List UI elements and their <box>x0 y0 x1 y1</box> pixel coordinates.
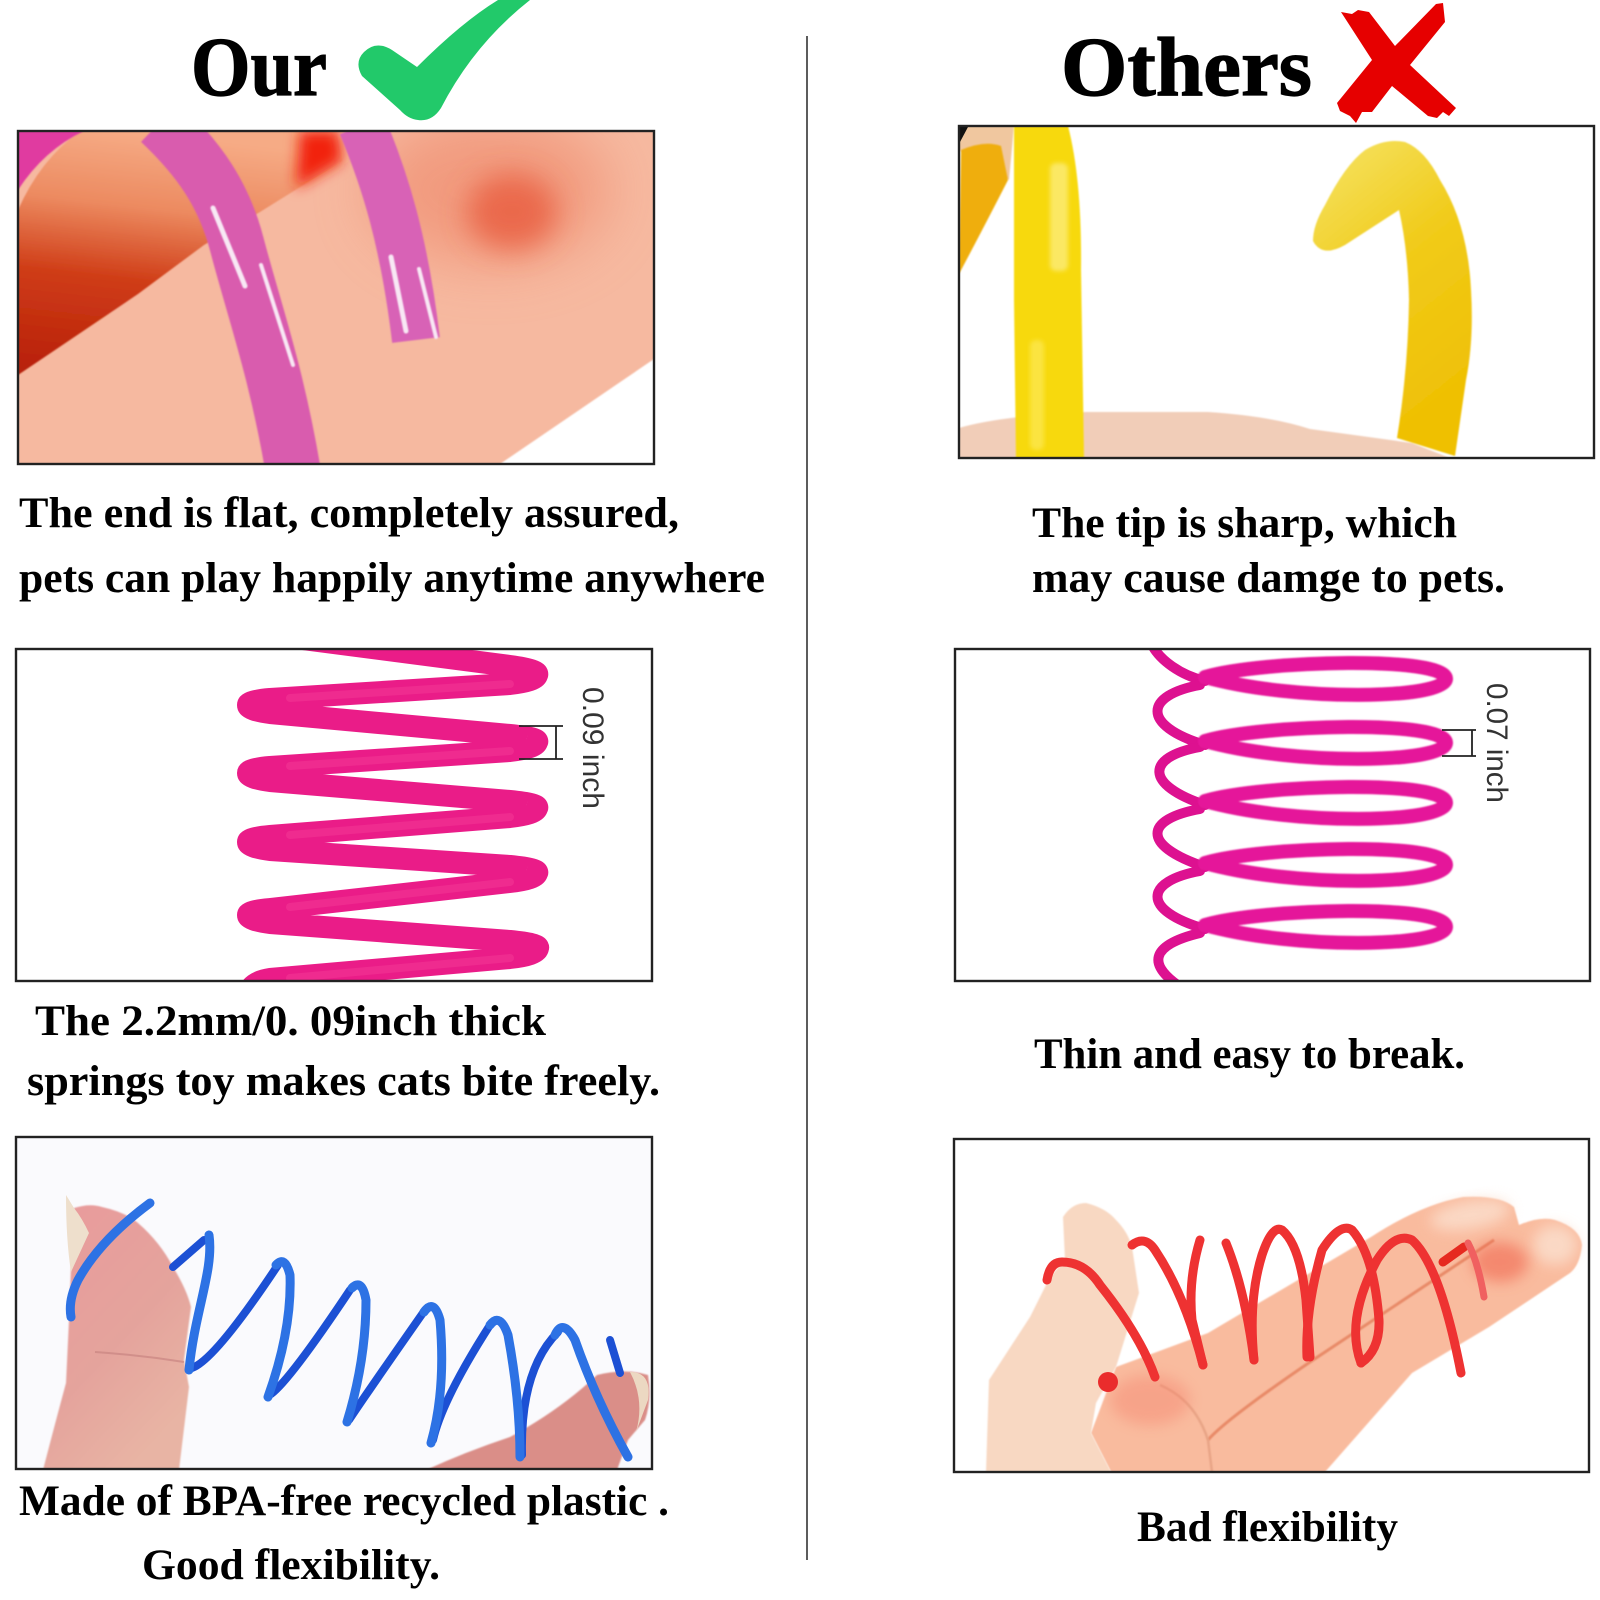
redness core <box>467 174 557 250</box>
caption: BPA-free: Made of BPA-free recycled plastic . <box>19 1478 669 1525</box>
spring tube flat end <box>362 125 416 340</box>
icon: green check mark <box>358 0 530 120</box>
yellow hook right <box>1313 141 1472 456</box>
yellow tube left <box>1014 126 1084 458</box>
skin at bottom <box>960 411 1448 457</box>
blue spring front strokes <box>70 1203 628 1457</box>
caption: flat end: pets can play happily anytime anywhere <box>19 555 765 602</box>
crease between fingers <box>1208 1240 1494 1440</box>
dimension label 0.09 inch: 0.09 inch <box>576 687 609 809</box>
bright red corner <box>296 131 342 188</box>
tube highlights <box>1050 163 1068 271</box>
panel: flat end photo <box>18 115 654 470</box>
center divider line <box>806 36 808 1560</box>
thumb nail <box>66 1195 89 1272</box>
skin background <box>18 131 654 464</box>
caption: flat end: The end is flat, completely assured, <box>19 490 679 537</box>
finger nail <box>630 1372 649 1432</box>
wide redness on skin <box>370 115 610 265</box>
caption: sharp tip: may cause damge to pets. <box>1032 555 1505 602</box>
panel: sharp tip photo <box>959 126 1594 462</box>
fingertip highlights <box>1428 1194 1512 1236</box>
dimension bracket 0.07 <box>1442 730 1476 756</box>
red spring end ball <box>1098 1372 1118 1392</box>
black corner mark <box>960 127 968 142</box>
panel: red spring photo <box>954 1139 1589 1472</box>
thick pink spring <box>248 638 538 995</box>
fingers base fill <box>1091 1197 1582 1472</box>
panel: thick spring 0.09 inch <box>16 638 652 995</box>
knuckle crease <box>95 1352 184 1362</box>
spring tube at top left corner <box>18 131 84 190</box>
caption: sharp tip <box>1032 500 1505 602</box>
caption: thick spring: springs toy makes cats bite freely. <box>27 1058 660 1105</box>
thin spring left coils <box>1152 645 1205 990</box>
caption: thick spring <box>27 998 660 1105</box>
caption: thin spring: Thin and easy to break. <box>1034 1031 1465 1078</box>
caption: bad flexibility: Bad flexibility <box>1137 1504 1399 1551</box>
red spring coils <box>1047 1262 1155 1377</box>
left skin and orange tube <box>959 126 1014 180</box>
caption: BPA-free <box>19 1478 669 1589</box>
spring tube long <box>160 122 293 470</box>
thumb <box>986 1203 1139 1472</box>
caption: sharp tip: The tip is sharp, which <box>1032 500 1457 547</box>
thumb <box>43 1205 191 1470</box>
caption: BPA-free: Good flexibility. <box>142 1542 440 1589</box>
lower finger <box>426 1372 649 1470</box>
panel: blue spring photo <box>16 1137 652 1470</box>
blue spring back strokes <box>173 1240 620 1455</box>
panel: thin spring 0.07 inch <box>955 645 1590 990</box>
fingertip redness <box>1472 1242 1528 1282</box>
icon: red brush X <box>1337 3 1456 123</box>
palm crease <box>1160 1385 1212 1472</box>
tube highlights <box>213 208 436 365</box>
thin pink spring loops <box>1205 663 1446 943</box>
dark red shadow between fingers <box>18 131 342 375</box>
caption: flat end <box>19 490 765 602</box>
dimension bracket 0.09 <box>519 726 563 759</box>
dimension label 0.07 inch: 0.07 inch <box>1480 683 1513 803</box>
caption: thick spring: The 2.2mm/0. 09inch thick <box>35 998 546 1045</box>
heading: Others: Others <box>1061 21 1312 114</box>
heading: Our: Our <box>191 21 327 114</box>
